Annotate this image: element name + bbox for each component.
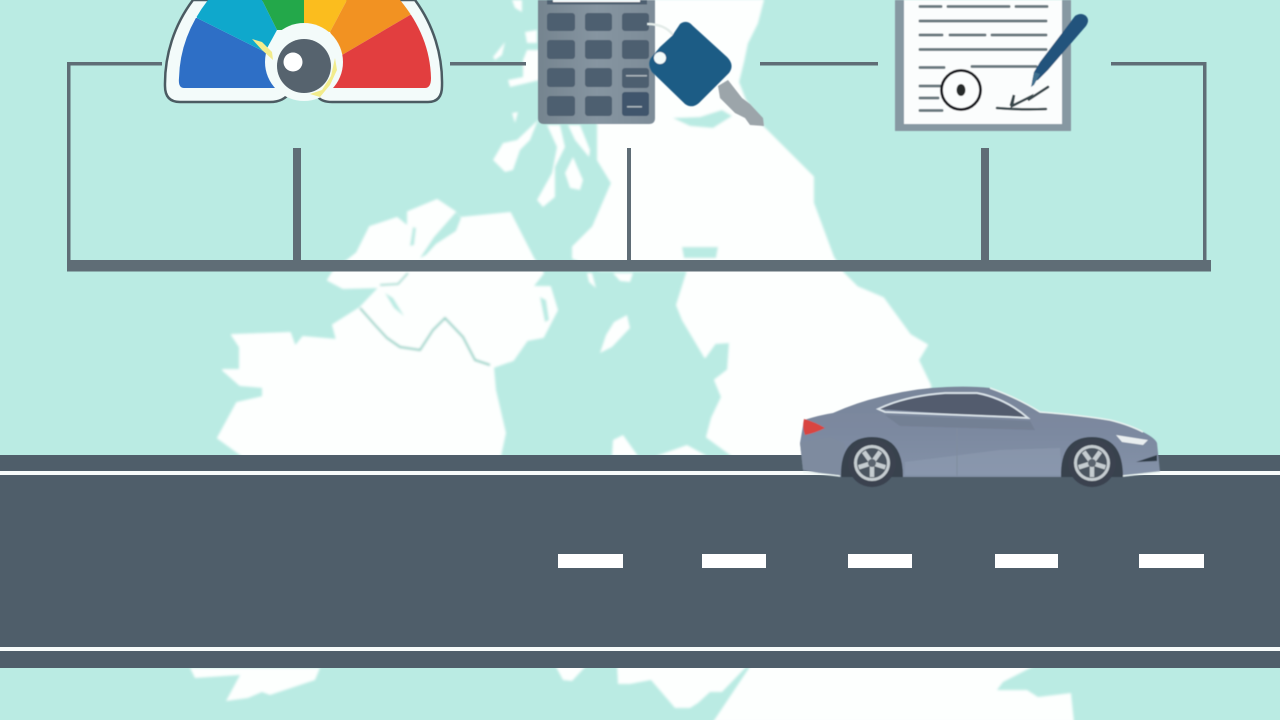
key ring: [647, 24, 674, 48]
gauge casing: [165, 0, 442, 102]
map: border line: [360, 308, 490, 365]
map: Irish coast channels: [385, 212, 549, 322]
key blade: [718, 80, 764, 126]
key fob: [649, 22, 732, 106]
map: southern coast: [190, 665, 1074, 720]
gauge colour segments: [170, 0, 440, 90]
calculator screen: [547, 0, 647, 4]
car belt line shade: [885, 415, 1035, 430]
document stamp centre: [956, 84, 966, 96]
car window trim: [878, 393, 1028, 418]
icon: signed document: [895, 0, 1088, 131]
key fob hole: [654, 52, 666, 64]
road edge line: bottom: [0, 647, 1280, 651]
grille: [1136, 455, 1157, 462]
signature: [997, 87, 1048, 109]
map: western isles: [493, 0, 633, 288]
map: Scottish firth: [673, 110, 732, 128]
document stamp: [942, 70, 980, 110]
car lower rear shade: [800, 437, 845, 476]
road: [0, 455, 1280, 668]
calculator keys: [547, 13, 649, 116]
calculator key marks: [626, 75, 647, 108]
car lower panel: [905, 448, 1062, 475]
map: Lough channel line: [380, 273, 408, 285]
pen: [1031, 14, 1088, 87]
document page: [904, 0, 1062, 124]
road surface: [0, 455, 1280, 668]
car body highlight edge: [803, 388, 1160, 476]
gauge knob: [277, 39, 331, 93]
map: Isle of Man: [600, 315, 630, 353]
icon: credit score gauge: [165, 0, 442, 102]
map: Ireland: [218, 200, 557, 456]
headlamp: [1116, 435, 1148, 445]
icon: calculator: [538, 0, 655, 124]
car door seam: [956, 428, 958, 476]
map: inland sea notch: [682, 247, 718, 258]
bracket frame: [67, 62, 1211, 272]
calculator body: [538, 0, 655, 124]
gauge yellow needle slivers: [252, 39, 337, 97]
car: [800, 387, 1160, 487]
car window: [880, 394, 1028, 418]
tail light: [803, 419, 825, 435]
document frame: [895, 0, 1071, 131]
map: UK and Ireland: [190, 0, 1074, 720]
gauge hub ring: [265, 23, 343, 101]
road centre dashes: [558, 554, 1204, 568]
map: Great Britain: [573, 0, 935, 456]
front wheel: [1061, 437, 1123, 487]
road edge line: top: [0, 471, 1280, 475]
rear wheel: [841, 437, 903, 487]
icon: car key: [647, 22, 764, 126]
map: Welsh coast pieces: [612, 435, 707, 456]
car body: [800, 387, 1160, 477]
document text lines: [920, 6, 1047, 110]
gauge knob highlight: [284, 52, 302, 72]
